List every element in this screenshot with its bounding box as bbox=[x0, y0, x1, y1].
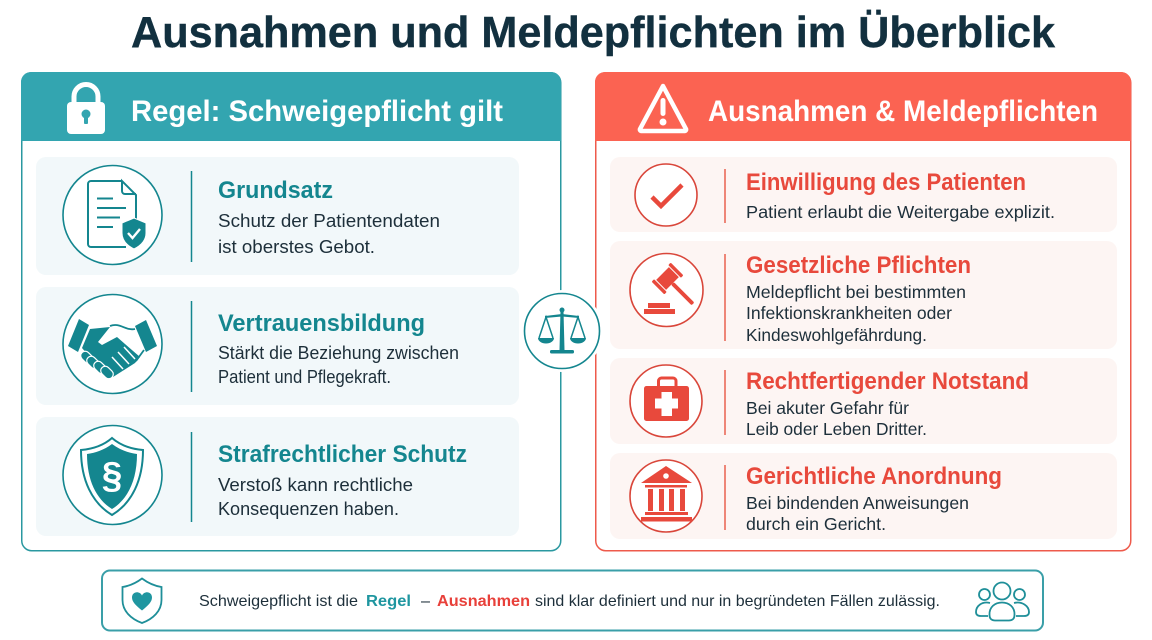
icon: gavel bbox=[630, 254, 703, 326]
card text: Meldepflicht bei bestimmten bbox=[746, 282, 966, 302]
card text: Leib oder Leben Dritter. bbox=[746, 419, 927, 439]
footer text: Schweigepflicht ist die bbox=[199, 593, 358, 610]
icon: courthouse bbox=[630, 460, 702, 532]
card text: Konsequenzen haben. bbox=[218, 498, 399, 519]
card heading: Gerichtliche Anordnung bbox=[746, 463, 1002, 490]
card text bbox=[746, 398, 927, 439]
card: Vertrauensbildung bbox=[36, 287, 519, 405]
card: Gerichtliche Anordnung bbox=[610, 453, 1117, 539]
card heading: Einwilligung des Patienten bbox=[746, 169, 1026, 196]
icon: shield with paragraph sign bbox=[63, 426, 162, 524]
card text bbox=[746, 282, 966, 345]
card text bbox=[746, 493, 969, 534]
card heading: Gesetzliche Pflichten bbox=[746, 252, 971, 279]
icon: shield with heart bbox=[122, 578, 162, 623]
panel header: Regel bbox=[21, 72, 561, 141]
footer text bbox=[199, 593, 940, 610]
card text bbox=[218, 210, 440, 257]
card text bbox=[218, 342, 459, 387]
card: Notstand bbox=[610, 358, 1117, 444]
panel: Regel bbox=[21, 72, 561, 551]
footer text: Ausnahmen bbox=[437, 593, 530, 610]
footer callout bbox=[102, 570, 1043, 630]
footer text: sind klar definiert und nur in begründeten Fällen zulässig. bbox=[535, 593, 940, 610]
icon: warning triangle bbox=[640, 86, 686, 131]
card text: Kindeswohlgefährdung. bbox=[746, 325, 927, 345]
panel: Ausnahmen bbox=[595, 72, 1131, 551]
card text: Patient und Pflegekraft. bbox=[218, 366, 391, 387]
card heading: Strafrechtlicher Schutz bbox=[218, 441, 467, 468]
icon: first aid kit bbox=[630, 365, 702, 437]
card text: Schutz der Patientendaten bbox=[218, 210, 440, 231]
header text: Ausnahmen & Meldepflichten bbox=[708, 95, 1098, 128]
footer text: Regel bbox=[366, 593, 411, 610]
card text: Bei akuter Gefahr für bbox=[746, 398, 909, 418]
card: Grundsatz bbox=[36, 157, 519, 275]
icon: document with shield bbox=[63, 166, 162, 264]
icon: group of people bbox=[976, 582, 1029, 620]
card: Einwilligung bbox=[610, 157, 1117, 232]
card: Gesetzliche Pflichten bbox=[610, 241, 1117, 349]
icon: shield with paragraph sign: § bbox=[102, 455, 122, 496]
card text: Verstoß kann rechtliche bbox=[218, 474, 413, 495]
icon: lock bbox=[67, 84, 105, 134]
footer text: – bbox=[421, 593, 430, 610]
header text: Regel: Schweigepflicht gilt bbox=[131, 95, 503, 128]
card text: durch ein Gericht. bbox=[746, 514, 886, 534]
card heading: Grundsatz bbox=[218, 177, 333, 204]
card: Strafrechtlicher Schutz bbox=[36, 417, 519, 536]
icon: check mark bbox=[635, 164, 697, 226]
card heading: Vertrauensbildung bbox=[218, 310, 425, 337]
panel header: Ausnahmen bbox=[595, 72, 1131, 141]
card text: Stärkt die Beziehung zwischen bbox=[218, 342, 459, 363]
card text: Bei bindenden Anweisungen bbox=[746, 493, 969, 513]
icon: handshake bbox=[63, 294, 162, 394]
card heading: Rechtfertigender Notstand bbox=[746, 368, 1029, 395]
card text: Patient erlaubt die Weitergabe explizit. bbox=[746, 202, 1055, 222]
card text: ist oberstes Gebot. bbox=[218, 236, 375, 257]
title: Ausnahmen und Meldepflichten im Überblick bbox=[131, 8, 1056, 57]
card text bbox=[218, 474, 413, 519]
card text: Infektionskrankheiten oder bbox=[746, 303, 952, 323]
icon: scales of justice bbox=[521, 290, 603, 372]
